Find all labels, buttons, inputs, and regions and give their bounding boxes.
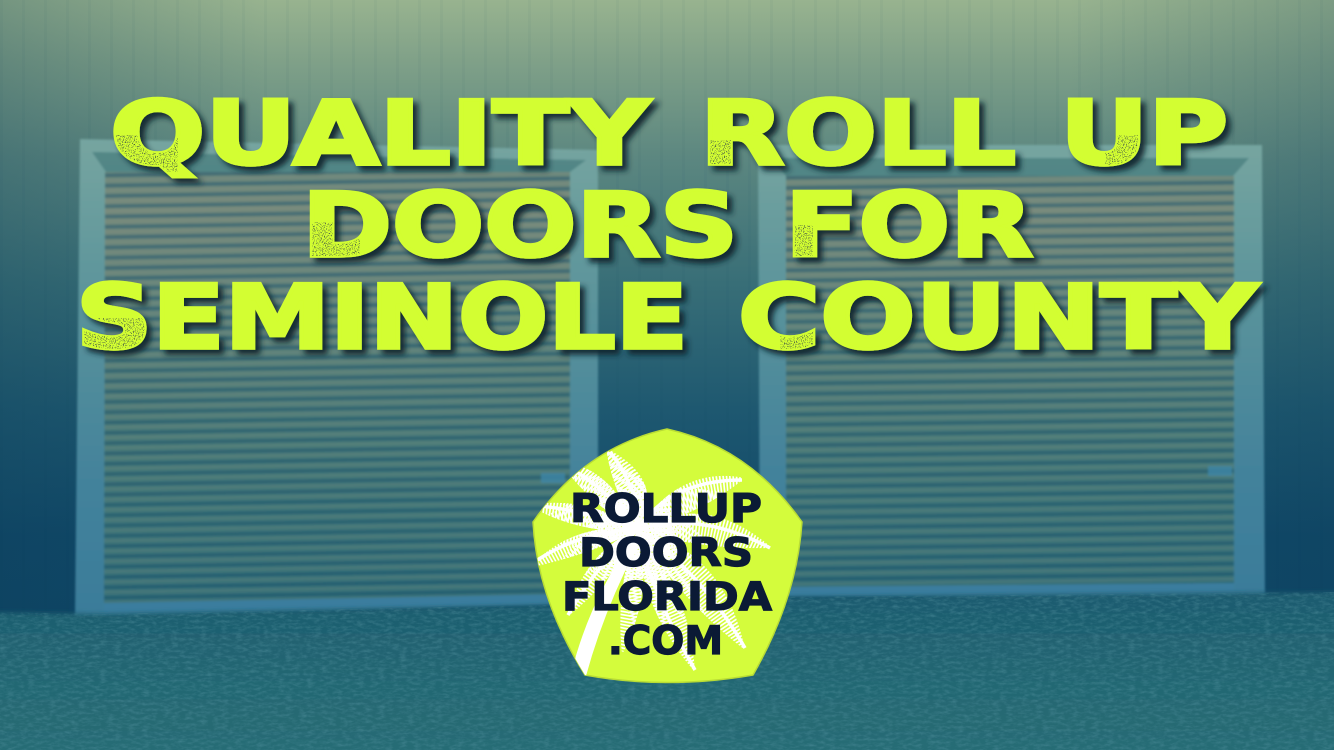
palm frond spines	[530, 452, 770, 670]
left door header shadow	[92, 152, 586, 172]
badge text	[562, 487, 772, 664]
title	[76, 82, 1260, 369]
badge shape	[533, 429, 802, 682]
badge text: .COM	[608, 619, 723, 664]
badge text: DOORS	[579, 531, 753, 576]
title text: UP	[1060, 82, 1228, 185]
badge text: FLORIDA	[562, 575, 772, 620]
right roll up door	[758, 145, 1265, 597]
title text: QUALITY	[110, 82, 652, 185]
right door frame	[758, 145, 1265, 597]
grass foreground	[0, 590, 1334, 750]
title text: SEMINOLE	[76, 266, 688, 369]
icon: palm tree	[530, 452, 770, 676]
right door bottom rail	[786, 583, 1234, 596]
title text: FOR	[785, 174, 1033, 277]
logo badge	[530, 429, 802, 682]
left door slats	[104, 172, 570, 603]
title text: ROLL	[700, 82, 1016, 185]
right door latch	[1208, 466, 1232, 476]
title text: COUNTY	[738, 266, 1260, 369]
left roll up door	[75, 139, 598, 617]
palm fronds feather barbs	[530, 452, 770, 670]
title text: DOORS	[302, 174, 738, 277]
left door frame	[75, 139, 598, 617]
left door bottom rail	[104, 594, 570, 613]
left door latch	[541, 473, 565, 483]
title text	[76, 82, 1260, 369]
distressed grain on title letters	[76, 135, 1150, 350]
badge text: ROLLUP	[570, 487, 762, 532]
palm trunk	[572, 540, 638, 676]
right door slats	[786, 176, 1234, 588]
right door header shadow	[772, 158, 1249, 176]
